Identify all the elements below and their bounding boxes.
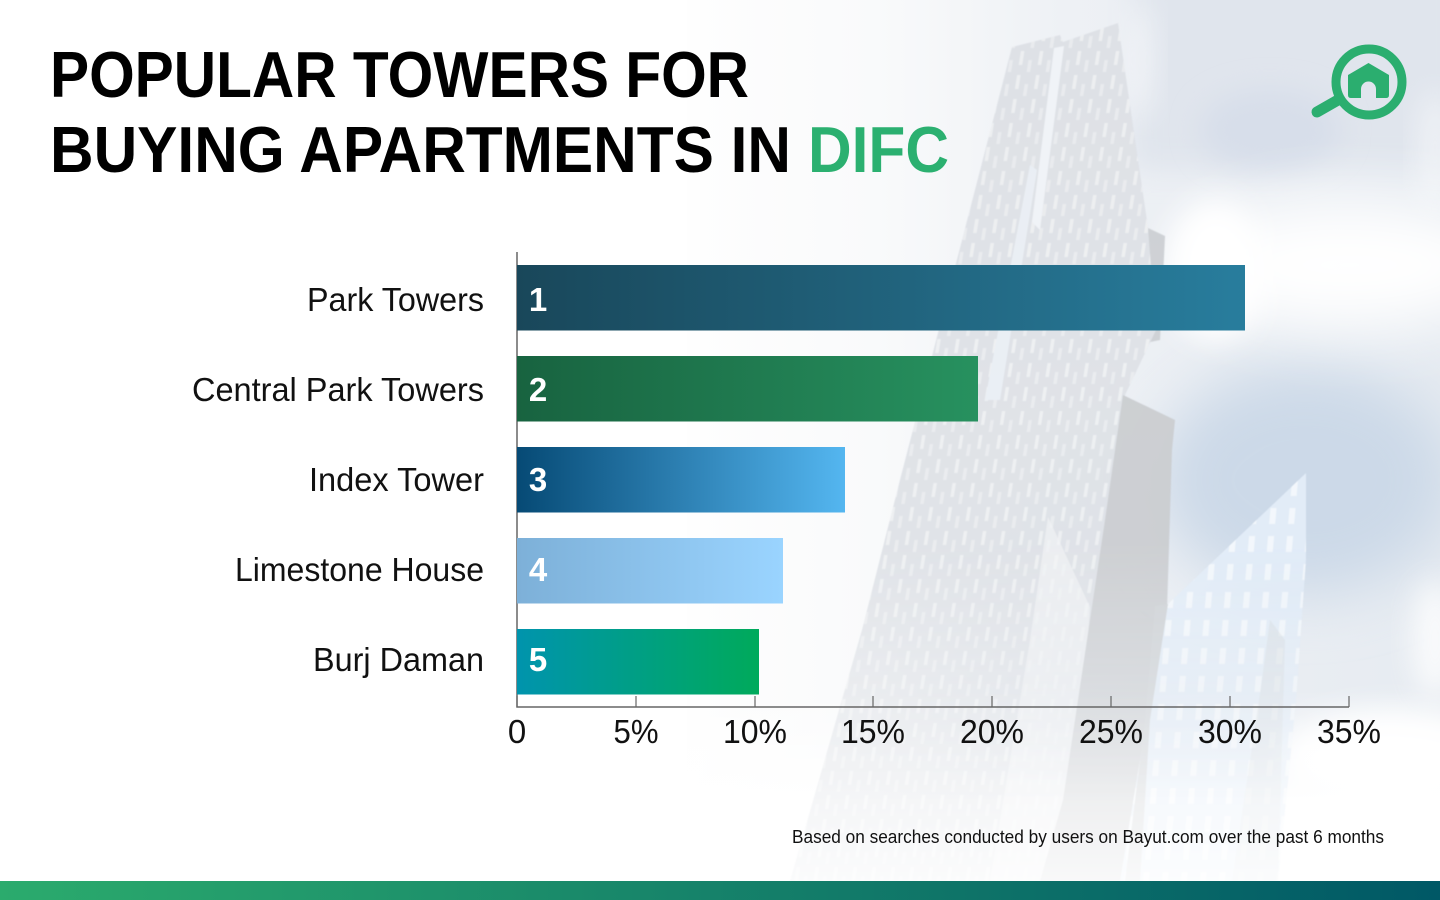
x-axis labels: 35% — [1317, 713, 1381, 750]
bar 3: Index Tower — [309, 447, 845, 512]
bar 4: Limestone House: Limestone House — [235, 551, 484, 588]
footer gradient bar — [0, 881, 1440, 900]
bar 1: Park Towers: Park Towers — [307, 281, 484, 318]
x-axis labels — [508, 713, 1381, 750]
axes — [517, 252, 1349, 707]
bar 5: Burj Daman: 5 — [529, 641, 547, 678]
x-axis labels: 25% — [1079, 713, 1143, 750]
bar 2: Central Park Towers: Central Park Towers — [192, 371, 484, 408]
bar chart — [192, 252, 1381, 750]
bar 1: Park Towers: 1 — [529, 281, 547, 318]
x-axis labels: 30% — [1198, 713, 1262, 750]
title: BUYING APARTMENTS IN — [50, 113, 791, 186]
bar 2: Central Park Towers: 2 — [529, 371, 547, 408]
bar 4: Limestone House: 4 — [529, 551, 548, 588]
background: sky and clouds — [687, 0, 1440, 881]
title: POPULAR TOWERS FOR — [50, 38, 749, 111]
source note: Based on searches conducted by users on Bayut.com over the past 6 months — [792, 827, 1384, 847]
bar 5: Burj Daman — [313, 629, 759, 694]
background: tower photograph — [790, 23, 1306, 881]
bar 3: Index Tower: 3 — [529, 461, 547, 498]
bar 1: Park Towers — [307, 265, 1245, 330]
title — [50, 38, 949, 186]
bar 4: Limestone House — [235, 538, 783, 604]
bar 3: Index Tower: Index Tower — [309, 461, 484, 498]
x-axis labels: 20% — [960, 713, 1024, 750]
bar 2: Central Park Towers — [192, 356, 978, 422]
icon: logo magnifier with house — [1317, 49, 1402, 115]
x-axis labels: 15% — [841, 713, 905, 750]
bar 5: Burj Daman: Burj Daman — [313, 641, 484, 678]
x-axis labels: 5% — [614, 713, 658, 750]
x-axis labels: 0 — [508, 713, 526, 750]
x-axis labels: 10% — [723, 713, 787, 750]
title: DIFC — [808, 113, 949, 186]
